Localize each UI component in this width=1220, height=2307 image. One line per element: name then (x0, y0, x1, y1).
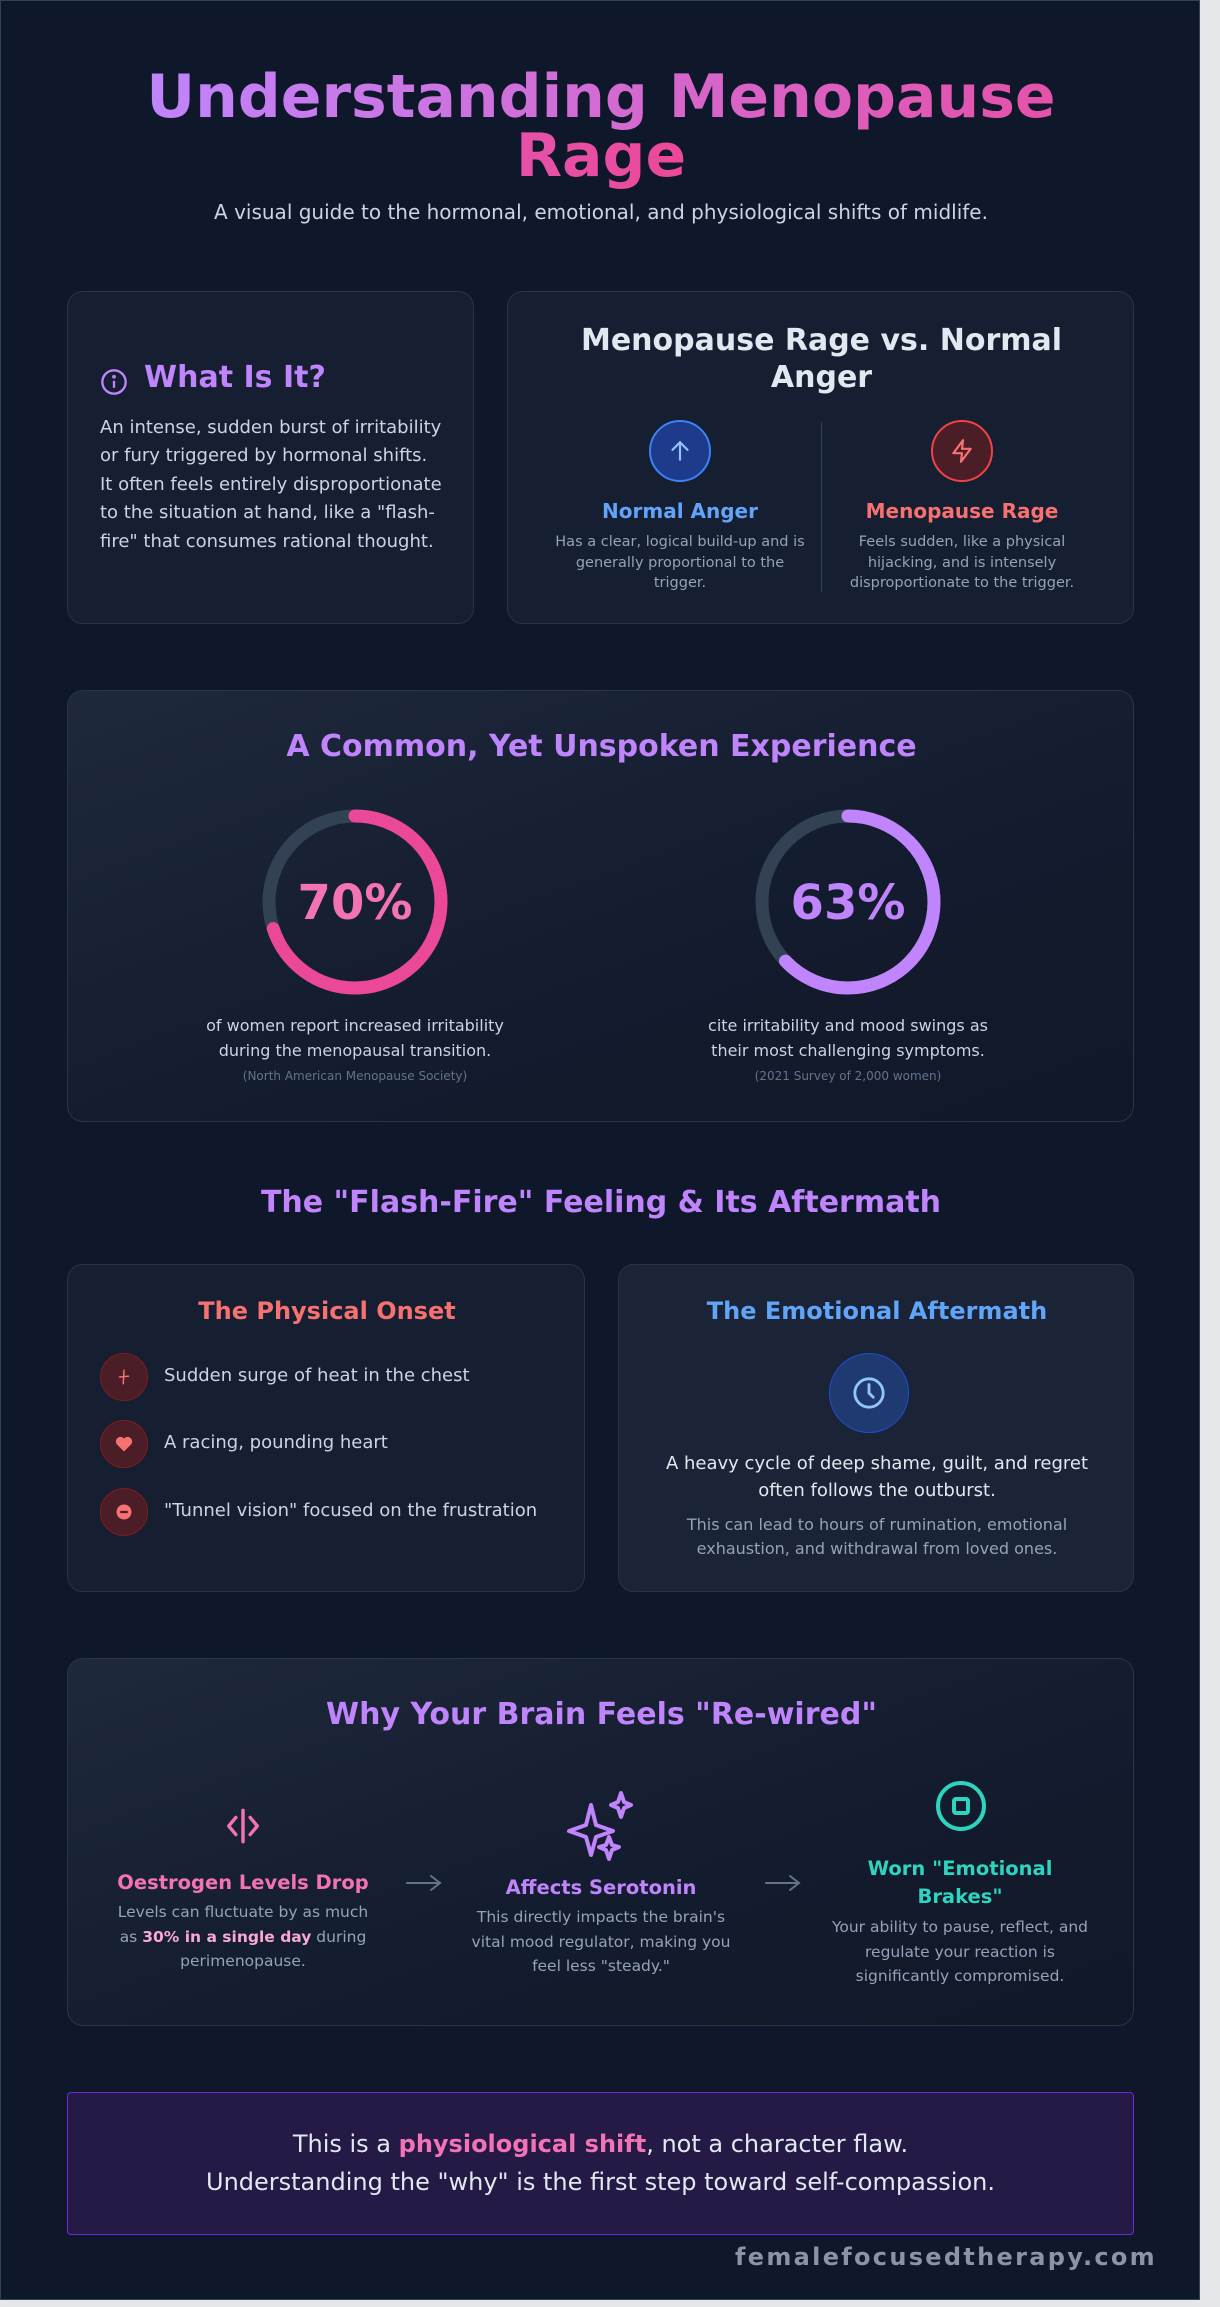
heading: physical onset: The Physical Onset (198, 1297, 456, 1325)
text: 70% caption (206, 1016, 504, 1083)
item: heat (100, 1353, 470, 1401)
step: oestrogen: Oestrogen Levels Drop (117, 1871, 369, 1894)
icon: info (101, 369, 127, 395)
chart: 63% donut: 63% (791, 875, 905, 931)
panel: statistics (67, 690, 1134, 1122)
step: serotonin (472, 1791, 730, 1975)
item: heart: A racing, pounding heart (164, 1432, 388, 1453)
item: tunnel vision: "Tunnel vision" focused on the frustration (164, 1500, 537, 1521)
chart: 70% donut (262, 810, 448, 994)
heading: flash-fire: The "Flash-Fire" Feeling & Its Aftermath (261, 1185, 941, 1220)
label: normal anger: Normal Anger (602, 499, 758, 523)
footer: website: femalefocusedtherapy.com (735, 2243, 1157, 2271)
heading: brain: Why Your Brain Feels "Re-wired" (326, 1697, 877, 1732)
step: serotonin: Affects Serotonin (506, 1876, 696, 1899)
text: 70% caption: of women report increased irritability during the menopausal transition. (206, 1016, 504, 1060)
title (146, 62, 1056, 191)
step: emotional brakes: Worn "Emotional (868, 1857, 1052, 1880)
title: Understanding Menopause (146, 62, 1056, 132)
icon: sparkles (566, 1791, 634, 1861)
heading: what is it: What Is It? (144, 360, 326, 395)
chart: 63% donut (756, 810, 940, 994)
title: Rage (516, 121, 686, 191)
text: 70% caption: (North American Menopause Society) (243, 1069, 467, 1083)
panel: rage vs anger (507, 291, 1134, 624)
arrow 1 (406, 1875, 442, 1891)
item: heat: Sudden surge of heat in the chest (164, 1365, 470, 1386)
step: oestrogen (117, 1808, 369, 1970)
heading: emotional aftermath: The Emotional Aftermath (707, 1297, 1047, 1325)
text: aftermath main: A heavy cycle of deep shame, guilt, and regret often follows the outburst. (666, 1453, 1088, 1501)
heading: comparison (581, 323, 1062, 395)
panel: what is it (67, 291, 474, 624)
icon: oestrogen (227, 1808, 259, 1844)
divider (821, 422, 822, 592)
column: menopause rage (850, 420, 1074, 591)
step: emotional brakes (832, 1781, 1088, 1985)
heading: common experience: A Common, Yet Unspoken Experience (286, 729, 917, 764)
text: definition: An intense, sudden burst of irritability or fury triggered by hormonal shifts. It often feels entirely disproportionate to the situation at hand, like a "flash-fire" that consumes rational thought. (100, 417, 442, 552)
icon: clock (829, 1353, 909, 1433)
text: aftermath sub: This can lead to hours of rumination, emotional exhaustion, and withdrawal from loved ones. (687, 1515, 1067, 1558)
panel: emotional aftermath (618, 1264, 1134, 1592)
chart: 70% donut: 70% (298, 875, 412, 931)
callout: conclusion: Understanding the "why" is the first step toward self-compassion. (206, 2168, 995, 2196)
text: 63% caption (708, 1016, 988, 1083)
text: normal anger: Has a clear, logical build-up and is generally proportional to the trigger. (555, 534, 805, 591)
text: 63% caption: cite irritability and mood swings as their most challenging symptoms. (708, 1016, 988, 1060)
callout: conclusion: This is a physiological shift, not a character flaw. (293, 2130, 908, 2158)
panel: physical onset (67, 1264, 585, 1592)
heading: comparison: Anger (771, 360, 872, 395)
step: emotional brakes: Your ability to pause, reflect, and regulate your reaction is significantly compromised. (832, 1918, 1088, 1985)
item: tunnel vision (100, 1488, 537, 1536)
subtitle: A visual guide to the hormonal, emotional, and physiological shifts of midlife. (214, 200, 988, 224)
icon: arrow up (649, 420, 711, 482)
step: emotional brakes: Brakes" (917, 1885, 1003, 1908)
label: menopause rage: Menopause Rage (866, 499, 1058, 523)
icon: stop (936, 1781, 986, 1831)
text: 63% caption: (2021 Survey of 2,000 women) (755, 1069, 941, 1083)
step: serotonin: This directly impacts the brain's vital mood regulator, making you feel less "steady." (472, 1908, 730, 1975)
callout: conclusion (67, 2092, 1134, 2235)
item: heart (100, 1420, 388, 1468)
column: normal anger (555, 420, 805, 591)
step: oestrogen: Levels can fluctuate by as much as 30% in a single day during perimenopause. (118, 1903, 368, 1970)
icon: lightning (931, 420, 993, 482)
text: menopause rage: Feels sudden, like a physical hijacking, and is intensely disproportionate to the trigger. (850, 534, 1074, 591)
panel: brain rewired (67, 1658, 1134, 2026)
heading: comparison: Menopause Rage vs. Normal (581, 323, 1062, 358)
arrow 2 (765, 1875, 800, 1891)
